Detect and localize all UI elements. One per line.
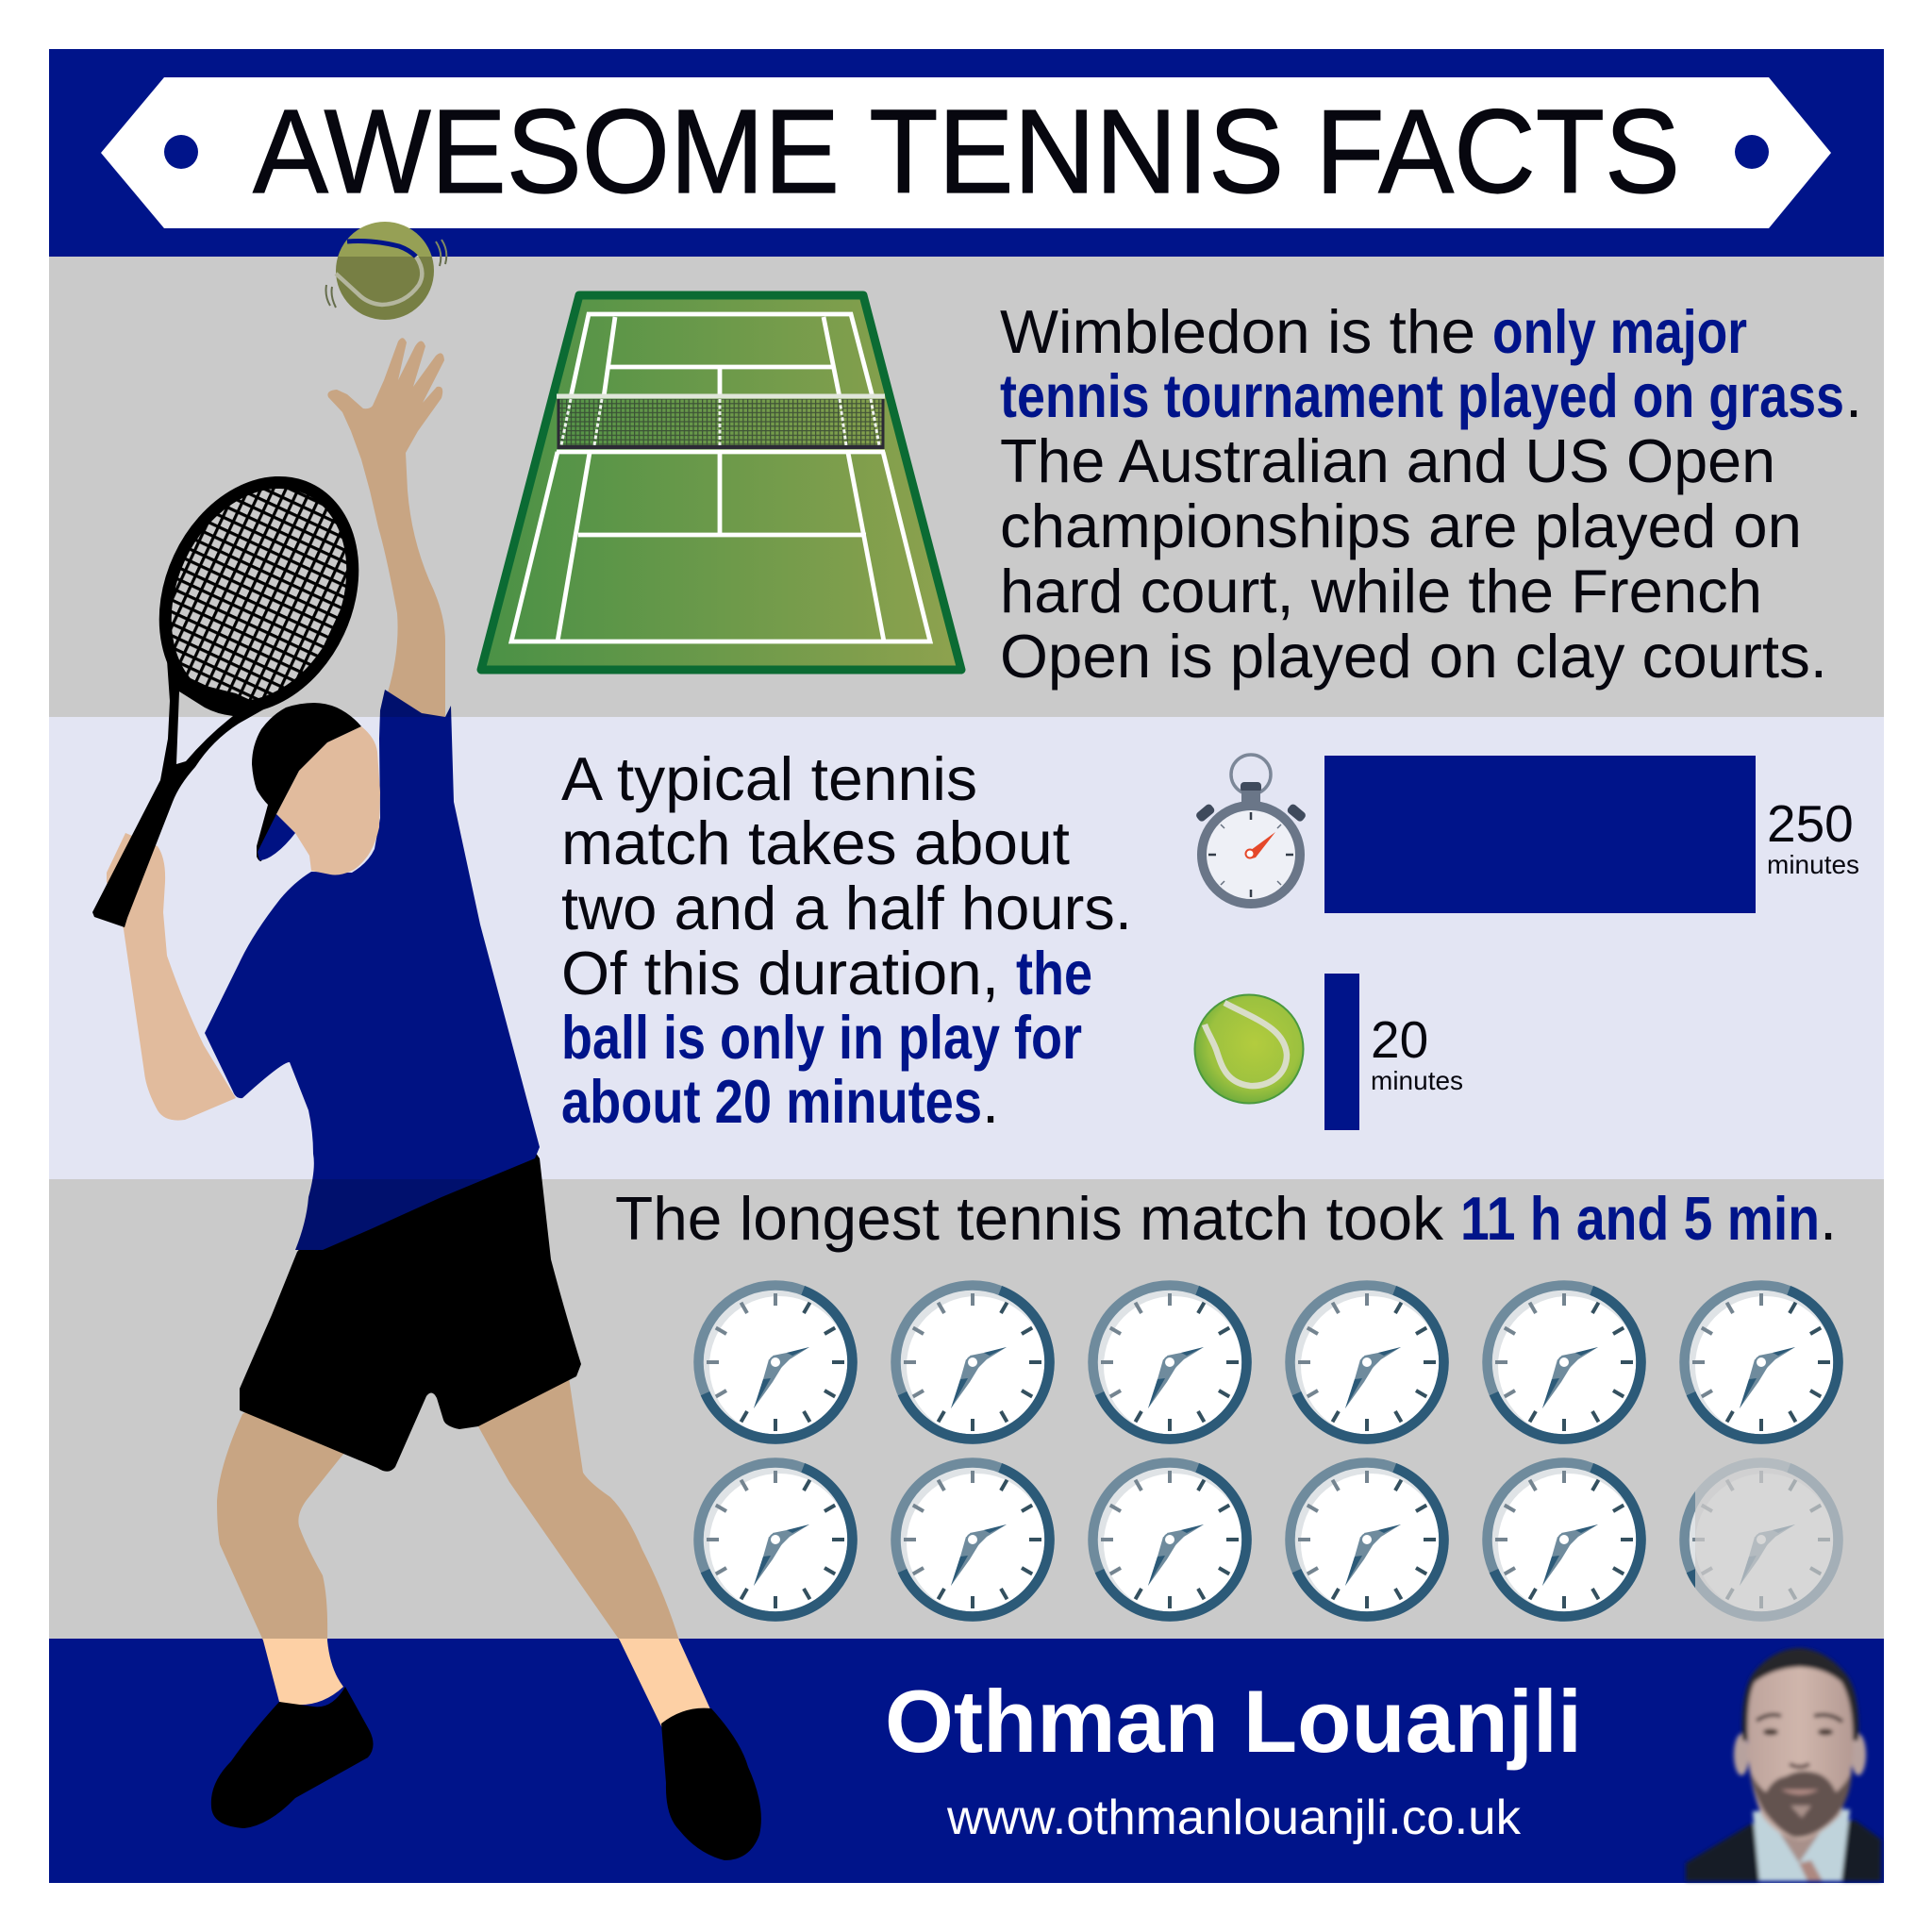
right shoe [661,1708,761,1860]
net [557,396,885,449]
title: AWESOME TENNIS FACTS [253,85,1680,218]
text block: match duration: Of this duration, [561,939,999,1008]
text block: Wimbledon fact: . [1845,361,1862,430]
text block: match duration: A typical tennis [561,744,977,813]
player far leg [478,1358,711,1730]
bar: ball in play 20 minutes [1324,974,1359,1130]
clock grid: 11 hours and 5 minutes [698,1285,1856,1632]
text block: match duration [561,744,1132,1136]
text block: Wimbledon fact: The Australian and US Open [1000,426,1775,495]
illustration: tennis player serving [92,222,761,1860]
title banner [101,77,1831,228]
icon: stopwatch [1194,755,1307,904]
text block: Wimbledon fact: only major [1492,297,1747,366]
text block: match duration: match takes about [561,808,1070,877]
text block: match duration: about 20 minutes [561,1067,982,1136]
footer website: www.othmanlouanjli.co.uk [946,1790,1522,1845]
icon: tennis ball [1194,994,1304,1104]
left shoe [211,1687,374,1828]
text block: Wimbledon fact [1000,297,1862,691]
panel: longest match background [49,1179,1884,1639]
bar label: 20 minutes: minutes [1371,1066,1463,1095]
text block: match duration: the [1016,939,1092,1008]
panel: match duration background [49,717,1884,1179]
bar: match 250 minutes [1324,756,1756,913]
portrait of author [1686,1648,1881,1881]
cap [252,703,361,861]
panel: header band [49,49,1884,257]
racket [92,476,358,927]
banner dot left [164,135,198,169]
panel: Wimbledon fact background [49,257,1884,717]
bar label: 250 minutes: minutes [1767,850,1859,879]
ball in the air [326,222,446,320]
raised arm and hand [327,338,445,722]
shirt [205,690,540,1250]
text: longest match: 11 h and 5 min [1460,1184,1820,1253]
cap underside [258,814,295,860]
text: longest match [615,1184,1837,1253]
bar label: 250 minutes [1767,794,1859,879]
tennis court [481,295,961,670]
text block: Wimbledon fact: championships are played on [1000,491,1802,560]
player near leg [217,1387,377,1705]
bar label: 20 minutes [1371,1010,1463,1095]
lower arm and hand on racket [107,833,236,1121]
banner dot right [1735,135,1769,169]
bar label: 250 minutes: 250 [1767,794,1854,853]
text block: Wimbledon fact: Wimbledon is the [1000,297,1475,366]
shorts [240,1141,581,1472]
bar label: 20 minutes: 20 [1371,1010,1428,1069]
text block: match duration: . [982,1067,999,1136]
text block: match duration: ball is only in play for [561,1003,1082,1072]
court lines [511,314,930,641]
panel: footer band [49,1639,1884,1883]
fade over the partial last clock [1695,1448,1856,1632]
text: longest match: . [1820,1184,1837,1253]
text: longest match: The longest tennis match took [615,1184,1444,1253]
head [276,726,380,875]
text block: match duration: two and a half hours. [561,874,1132,942]
text block: Wimbledon fact: Open is played on clay courts. [1000,622,1827,691]
text block: Wimbledon fact: hard court, while the French [1000,557,1762,625]
footer name: Othman Louanjli [885,1672,1582,1771]
